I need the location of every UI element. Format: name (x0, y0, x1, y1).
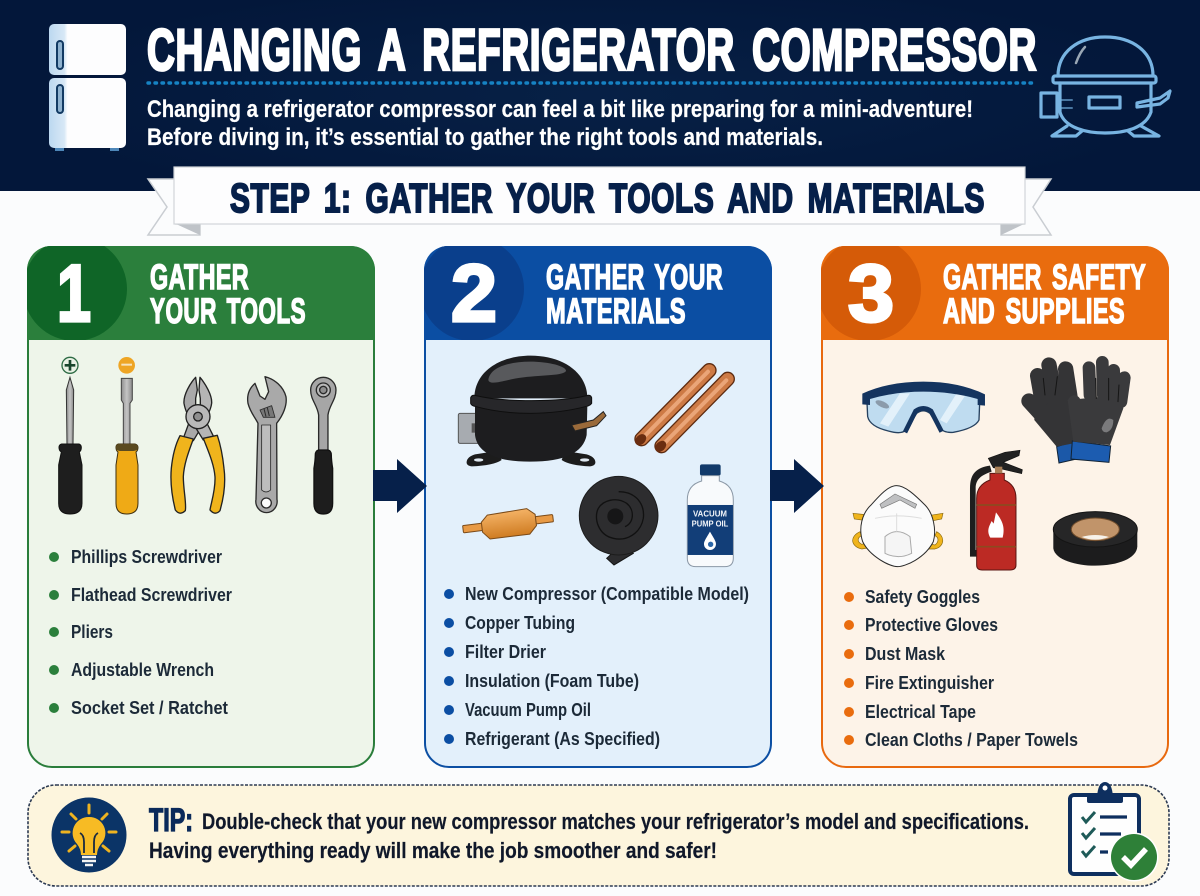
foam insulation roll (579, 476, 658, 565)
safety list: Clean Cloths / Paper Towels (865, 729, 1078, 750)
compressor (458, 356, 606, 466)
tools list: Socket Set / Ratchet (71, 697, 228, 718)
tools list: Pliers (71, 621, 113, 642)
safety list (844, 586, 1078, 750)
materials list: Refrigerant (As Specified) (465, 728, 660, 749)
safety list: Electrical Tape (865, 701, 976, 722)
socket ratchet (311, 377, 336, 514)
materials list: Vacuum Pump Oil (465, 699, 591, 720)
pliers (171, 377, 225, 513)
step banner (148, 167, 1051, 235)
panel 1 header: YOUR TOOLS (150, 292, 306, 331)
vacuum pump oil bottle (687, 464, 733, 567)
vacuum pump oil bottle: PUMP OIL (692, 519, 729, 529)
safety list: Fire Extinguisher (865, 672, 994, 693)
electrical tape (1053, 512, 1137, 566)
arrow: panel 2 to 3 (770, 459, 824, 513)
intro text: Before diving in, it’s essential to gather the right tools and materials. (147, 124, 823, 151)
fire extinguisher (970, 450, 1022, 570)
safety list: Dust Mask (865, 643, 946, 664)
materials list: New Compressor (Compatible Model) (465, 583, 749, 604)
panel 2: materials (420, 237, 772, 767)
filter drier (462, 506, 555, 542)
materials list: Copper Tubing (465, 612, 575, 633)
safety illustration (853, 362, 1137, 570)
bottle label: VACUUM (693, 508, 727, 518)
icon: refrigerator (49, 24, 126, 151)
tools list (49, 546, 232, 718)
panel 1: tools (23, 237, 375, 767)
materials list: Filter Drier (465, 641, 546, 662)
safety list: Protective Gloves (865, 614, 998, 635)
safety list: Safety Goggles (865, 586, 980, 607)
panel 1 header: GATHER (150, 258, 249, 297)
safety goggles (862, 382, 985, 433)
panel 2 header: GATHER YOUR (546, 258, 723, 297)
protective gloves (1029, 362, 1124, 463)
tools illustration (59, 357, 336, 514)
materials list (444, 583, 749, 749)
phillips screwdriver (59, 357, 82, 514)
icon: light bulb (52, 798, 126, 872)
panel 2 header: MATERIALS (546, 292, 686, 331)
intro text (147, 96, 973, 151)
icon: compressor outline (1041, 37, 1170, 136)
tip text: Having everything ready will make the job smoother and safer! (149, 838, 717, 863)
materials illustration (458, 356, 733, 567)
tip box (28, 782, 1169, 886)
icon: clipboard (1070, 782, 1158, 882)
panel 2 header (424, 246, 772, 340)
panel 3 header (821, 246, 1169, 340)
tip text (149, 802, 1029, 863)
panel 1 header: 1 (57, 249, 91, 339)
arrow: panel 1 to 2 (373, 459, 427, 513)
tools list: Adjustable Wrench (71, 659, 214, 680)
panel 3: safety (817, 237, 1169, 767)
materials list: Insulation (Foam Tube) (465, 670, 639, 691)
adjustable wrench (248, 377, 286, 513)
tools list: Phillips Screwdriver (71, 546, 222, 567)
copper tubes (633, 370, 728, 454)
flathead screwdriver (116, 357, 138, 514)
tip text: TIP: (149, 802, 193, 838)
dust mask (853, 486, 943, 567)
tools list: Flathead Screwdriver (71, 584, 232, 605)
header band (0, 0, 1200, 191)
tip text: Double-check that your new compressor matches your refrigerator’s model and specifications. (202, 809, 1029, 834)
intro text: Changing a refrigerator compressor can feel a bit like preparing for a mini-adventure! (147, 96, 973, 123)
panel 3 header: 3 (848, 249, 894, 339)
dotted divider (148, 81, 1037, 85)
panel 1 header (27, 246, 375, 340)
panel 2 header: 2 (451, 249, 497, 339)
